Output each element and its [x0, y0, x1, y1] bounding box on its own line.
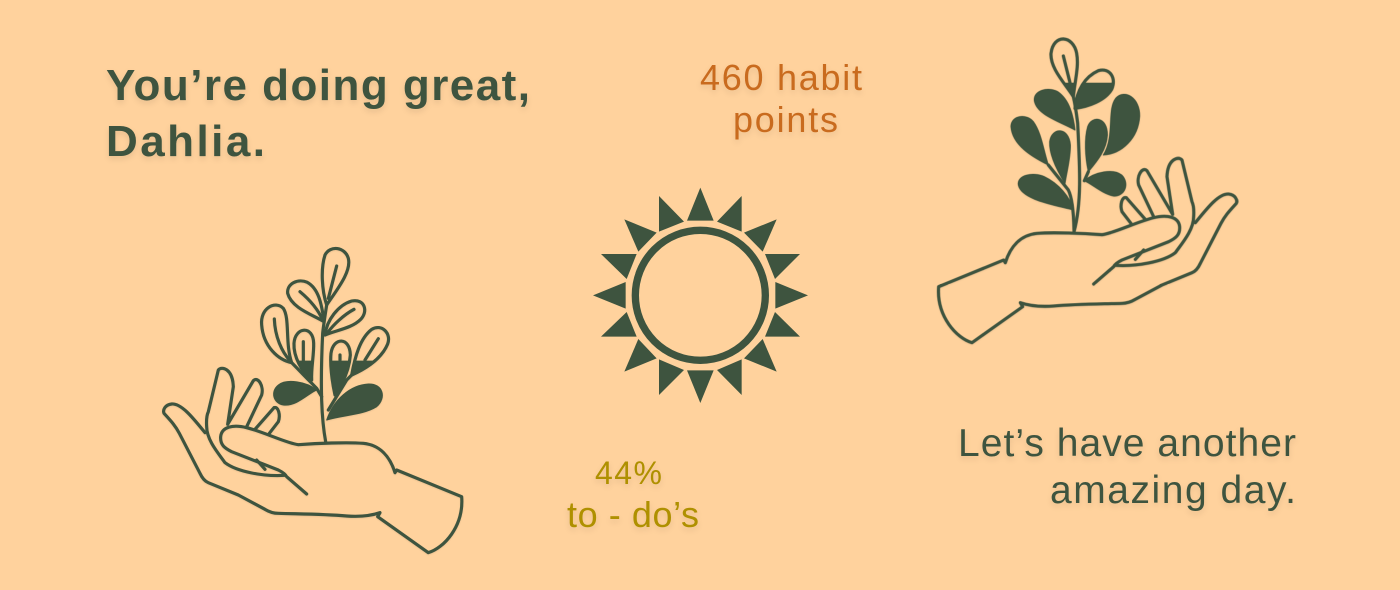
- habit points stat: 460 habit: [700, 57, 862, 98]
- to-do percentage stat: 44%: [595, 455, 662, 491]
- habit points stat: [700, 57, 862, 140]
- hand outline: [164, 368, 462, 553]
- title: [106, 61, 530, 166]
- habit points stat: points: [733, 99, 838, 140]
- hand outline: [938, 158, 1237, 343]
- to-do percentage stat: to - do’s: [567, 494, 699, 535]
- closing message: [958, 422, 1296, 512]
- to-do percentage stat: [567, 455, 699, 535]
- closing message: amazing day.: [1050, 469, 1296, 512]
- icon: sun: [593, 188, 808, 403]
- closing message: Let’s have another: [958, 422, 1296, 465]
- title: Dahlia.: [106, 117, 265, 166]
- illustration: right hand holding filled plant: [938, 39, 1237, 343]
- plant: [1048, 39, 1113, 232]
- plant: [262, 248, 389, 442]
- title: You’re doing great,: [106, 61, 530, 110]
- illustration: left hand holding outlined plant: [164, 248, 462, 553]
